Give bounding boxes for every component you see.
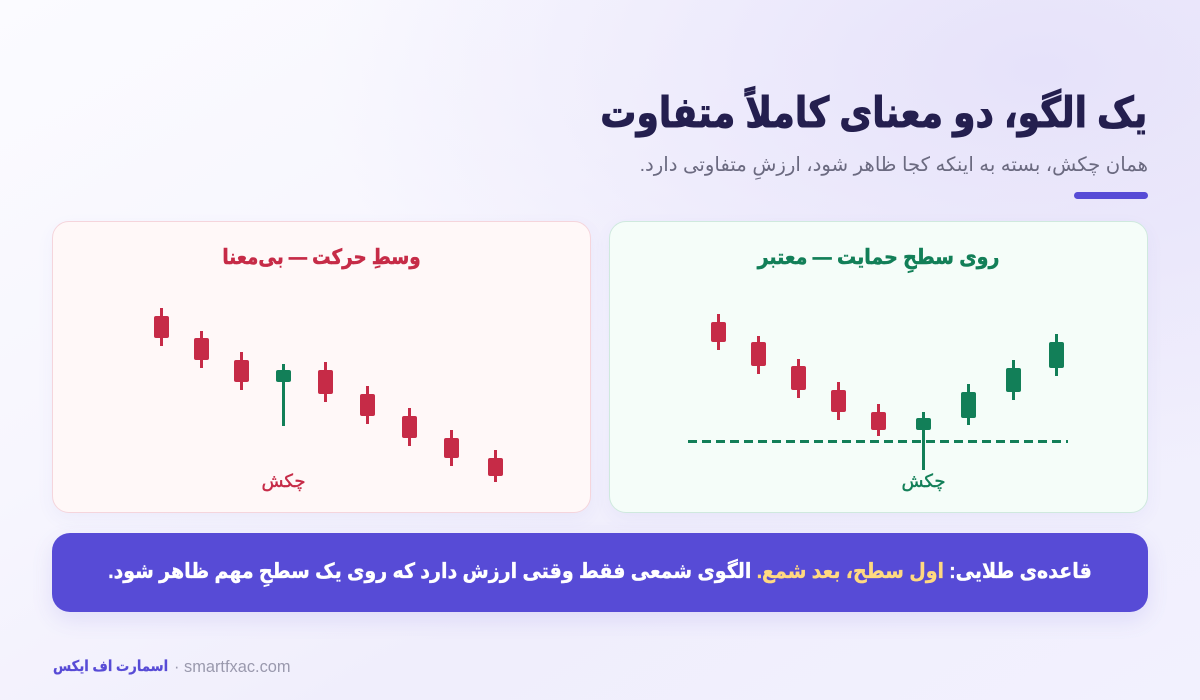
panel: on support, valid (609, 221, 1148, 513)
banner text: قاعده‌ی طلایی: اول سطح، بعد شمع. الگوی شمعی فقط وقتی ارزش دارد که روی یک سطحِ مهم ظاهر شود. (108, 560, 1092, 583)
chart: candles at support (688, 314, 1068, 491)
golden rule banner (52, 533, 1148, 612)
hammer label: چکش (901, 471, 946, 491)
brand name: اسمارت اف ایکس (53, 658, 168, 675)
red candles before hammer (154, 308, 249, 390)
title: یک الگو، دو معنای کاملاً متفاوت (600, 89, 1147, 136)
red candles after hammer (318, 362, 503, 482)
green candles (961, 334, 1064, 425)
panel heading: on support: روی سطحِ حمایت — معتبر (758, 246, 999, 269)
accent bar (1074, 192, 1148, 199)
panel: mid-move, meaningless (52, 221, 591, 513)
hammer candle mid-move (276, 364, 291, 426)
support line (688, 440, 1068, 443)
hammer candle at support (916, 412, 931, 470)
panel heading: mid-move: وسطِ حرکت — بی‌معنا (222, 246, 421, 269)
separator and website: · smartfxac.com (174, 658, 291, 676)
subtitle: همان چکش، بسته به اینکه کجا ظاهر شود، ارزشِ متفاوتی دارد. (640, 154, 1148, 176)
footer (53, 658, 291, 676)
hammer label: چکش (261, 471, 306, 491)
chart: candles mid-move (154, 308, 503, 491)
red candles (711, 314, 886, 436)
